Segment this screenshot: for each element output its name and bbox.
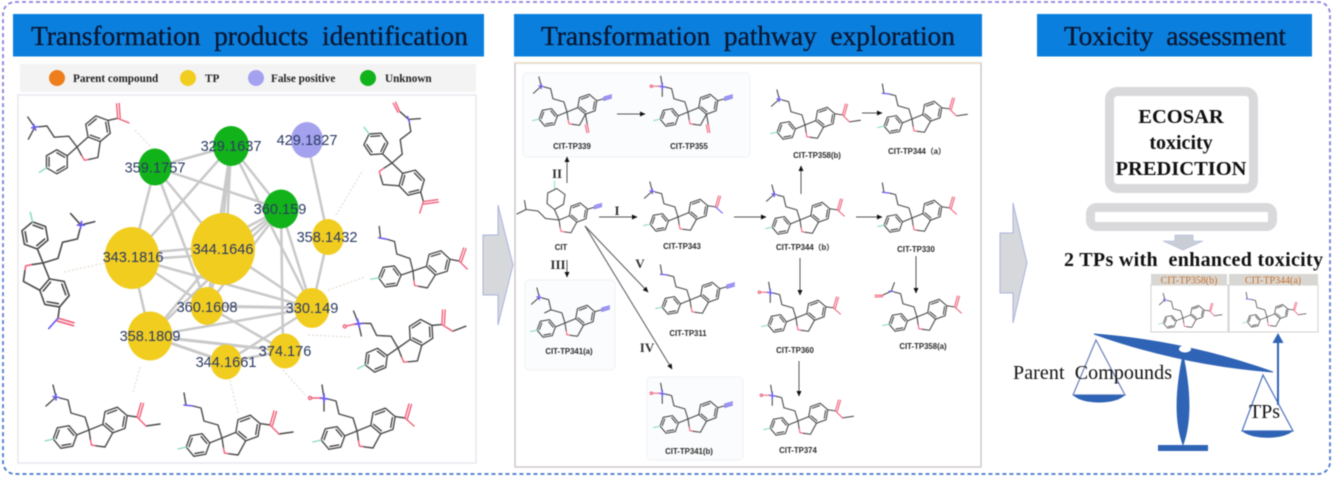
pathway frame xyxy=(515,63,981,467)
network nodes with m/z labels: 360.159 xyxy=(254,202,306,218)
compound: CIT-TP374 xyxy=(760,385,853,455)
heading: transformation pathway exploration: Transformation pathway exploration xyxy=(541,20,955,51)
heading: transformation products identification xyxy=(13,14,484,56)
heading: toxicity assessment: Toxicity assessment xyxy=(1064,20,1286,51)
enhanced toxicity compound: CIT-TP358(b) xyxy=(1151,274,1228,332)
pathway roman numerals: IV xyxy=(640,340,655,355)
pathway roman numerals xyxy=(550,166,655,355)
enhanced toxicity compound: CIT-TP358(b): CIT-TP358(b) xyxy=(1161,276,1217,286)
computer icon with ECOSAR text xyxy=(1090,92,1272,226)
legend xyxy=(20,64,476,92)
small down arrow xyxy=(1163,235,1203,250)
compound: CIT-TP341(b) xyxy=(650,383,732,456)
compound: CIT-TP344(a): CIT-TP344（a） xyxy=(888,147,946,156)
compound: CIT-TP311 xyxy=(656,265,734,338)
compound: CIT-TP355 xyxy=(650,76,732,151)
computer icon with ECOSAR text: PREDICTION xyxy=(1116,158,1247,180)
pathway roman numerals: II xyxy=(552,166,562,181)
compound: CIT-TP358(a) xyxy=(875,283,961,351)
compound: CIT-TP330: CIT-TP330 xyxy=(897,245,936,254)
enhanced toxicity compound: CIT-TP344(a) xyxy=(1229,274,1318,332)
arrow: identification to pathway xyxy=(483,205,513,325)
compound: CIT-TP339 xyxy=(533,77,611,151)
heading: toxicity assessment xyxy=(1037,14,1312,56)
legend: Parent compound xyxy=(73,73,159,85)
network nodes with m/z labels: 343.1816 xyxy=(103,250,163,266)
compound: CIT-TP344(b): CIT-TP344（b） xyxy=(776,243,834,252)
compound: CIT-TP343 xyxy=(644,182,722,251)
highlight boxes xyxy=(523,73,750,460)
legend: TP xyxy=(205,73,219,85)
heading: transformation products identification: Transformation products identification xyxy=(31,20,468,51)
enhanced toxicity compound: CIT-TP344(a): CIT-TP344(a) xyxy=(1245,276,1301,286)
network nodes with m/z labels: 429.1827 xyxy=(277,133,337,149)
compound: CIT-TP358(b): CIT-TP358(b) xyxy=(793,151,841,160)
network nodes with m/z labels: 358.1432 xyxy=(297,230,357,246)
compound: CIT-TP355: CIT-TP355 xyxy=(670,142,709,151)
compound: CIT-TP339: CIT-TP339 xyxy=(553,142,592,151)
pathway roman numerals: III xyxy=(550,257,566,272)
network nodes with m/z labels: 344.1646 xyxy=(193,242,253,258)
panel: transformation products identification xyxy=(13,14,484,463)
compound: CIT xyxy=(517,181,602,252)
compound: CIT-TP343: CIT-TP343 xyxy=(663,242,702,251)
network edges xyxy=(132,140,328,362)
label: parent compounds: Parent Compounds xyxy=(1013,362,1172,384)
computer icon with ECOSAR text: ECOSAR xyxy=(1138,106,1224,128)
compound: CIT-TP358(a): CIT-TP358(a) xyxy=(899,342,947,351)
balance scale icon xyxy=(1073,334,1293,451)
compound: CIT-TP360: CIT-TP360 xyxy=(776,346,815,355)
arrow: pathway to toxicity xyxy=(1000,203,1027,323)
pathway arrows xyxy=(567,113,916,396)
structures around the network xyxy=(20,85,471,456)
compound: CIT-TP341(b): CIT-TP341(b) xyxy=(665,447,713,456)
compound: CIT-TP341(a): CIT-TP341(a) xyxy=(545,347,593,356)
network nodes with m/z labels: 329.1637 xyxy=(201,139,261,155)
compound: CIT-TP341(a) xyxy=(531,288,609,356)
computer icon with ECOSAR text: toxicity xyxy=(1149,132,1213,154)
network nodes with m/z labels: 374.176 xyxy=(259,344,311,360)
network nodes with m/z labels: 344.1661 xyxy=(196,355,256,371)
dashed links from nodes to structures xyxy=(64,130,365,413)
heading: transformation pathway exploration xyxy=(514,14,982,56)
compound: CIT-TP358(b) xyxy=(771,90,860,160)
network nodes with m/z labels: 359.1757 xyxy=(125,160,185,176)
compound: CIT-TP374: CIT-TP374 xyxy=(779,446,818,455)
legend: Unknown xyxy=(385,73,432,85)
compound: CIT-TP311: CIT-TP311 xyxy=(669,329,707,338)
compound: CIT-TP344(a) xyxy=(878,84,967,156)
compound: CIT-TP360 xyxy=(758,282,840,355)
label: TPs: TPs xyxy=(1249,401,1280,423)
compound: CIT-TP330 xyxy=(878,183,956,254)
network nodes with m/z labels: 330.149 xyxy=(286,301,338,317)
network chart panel xyxy=(18,95,476,463)
network nodes with m/z labels xyxy=(103,122,357,380)
panel: toxicity assessment xyxy=(1013,14,1323,451)
compound: CIT: CIT xyxy=(555,243,568,252)
pathway roman numerals: I xyxy=(614,203,620,218)
result text: 2 TPs with enhanced toxicity xyxy=(1064,249,1323,271)
compound: CIT-TP344(b) xyxy=(766,185,844,252)
network nodes with m/z labels: 360.1608 xyxy=(177,300,237,316)
pathway roman numerals: V xyxy=(635,256,645,271)
legend: False positive xyxy=(271,73,335,85)
network nodes with m/z labels: 358.1809 xyxy=(120,329,180,345)
up arrow xyxy=(1272,333,1284,405)
panel: transformation pathway exploration xyxy=(514,14,982,467)
